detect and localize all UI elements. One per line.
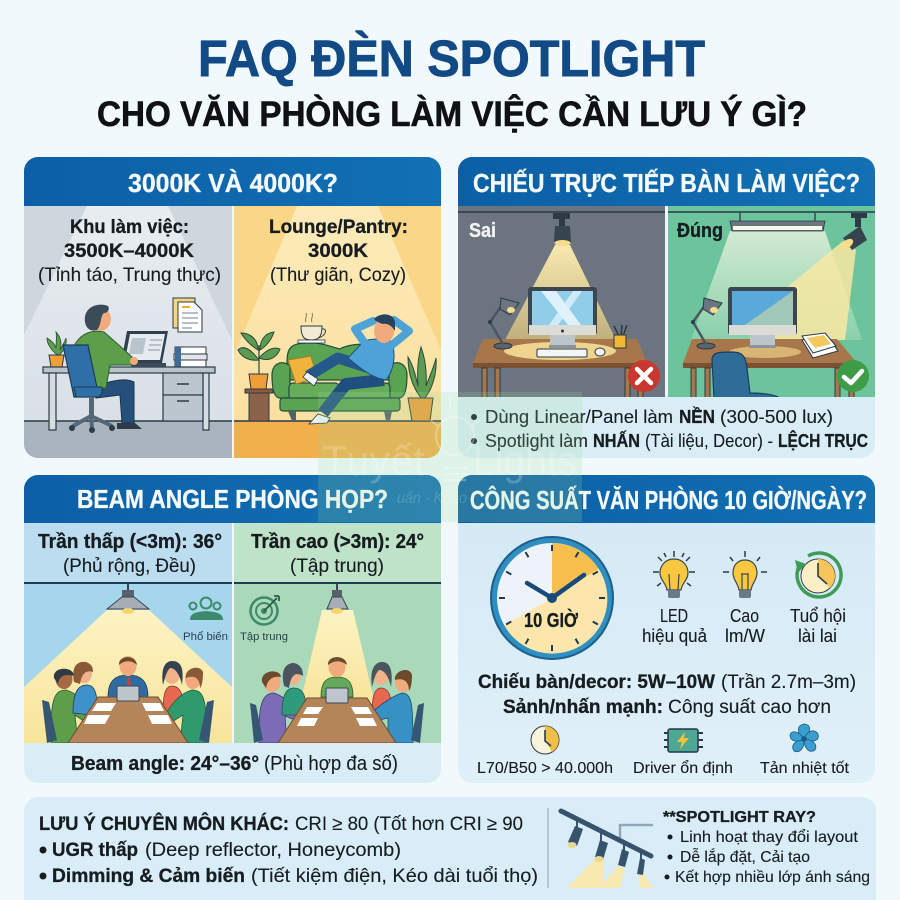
work area text: (Tỉnh táo, Trung thực): [38, 264, 221, 286]
label: Đúng: Đúng: [677, 220, 723, 242]
pillow: [288, 356, 317, 384]
office chair: [63, 345, 115, 433]
watermark: Tuyết Lights: Lights: [473, 437, 577, 484]
right half: lounge scene: [234, 206, 441, 458]
panel: công suất văn phòng 10 giờ/ngày: [458, 475, 875, 783]
high ceiling text: [251, 531, 424, 577]
title: [97, 30, 807, 134]
label: Cao lm/W: [725, 606, 765, 646]
title: FAQ ĐÈN SPOTLIGHT: [198, 30, 705, 87]
beam angle summary: Beam angle: 24°–36°: [71, 753, 259, 775]
expert notes text: Dimming & Cảm biến: [52, 866, 245, 887]
label: Tuổ hội lài lai: [790, 606, 846, 646]
icon: monitor: [728, 287, 797, 348]
spotlight ray text: [663, 809, 870, 886]
relaxing person: [303, 314, 409, 424]
work area text: 3500K–4000K: [64, 240, 194, 262]
work area text: [38, 216, 221, 286]
blue chair: [712, 352, 780, 398]
spotlight ray text: Linh hoạt thay đổi layout: [680, 828, 859, 846]
label: Sai: Sai: [469, 220, 496, 242]
laptop: [121, 331, 168, 367]
subtitle: CHO VĂN PHÒNG LÀM VIỆC CẦN LƯU Ý GÌ?: [97, 94, 807, 134]
bullet notes: [458, 397, 875, 458]
low ceiling text: (Phủ rộng, Đều): [63, 556, 196, 577]
panel: beam angle phòng họp: [24, 475, 441, 783]
high ceiling text: Trần cao (>3m): 24°: [251, 531, 424, 553]
watermark: Tuyết Lights: Tuyết: [322, 437, 425, 484]
work area text: Khu làm việc:: [70, 216, 189, 238]
icon: cooling fan: [790, 724, 818, 752]
icon: potted plant on stool: [238, 332, 280, 421]
desk: [43, 367, 215, 430]
panel: lưu ý chuyên môn khác: [24, 797, 876, 900]
label: Phổ biến: Phổ biến: [183, 631, 228, 643]
chairs: [42, 700, 214, 743]
expert notes text: [39, 813, 538, 887]
keyboard and mouse: [537, 348, 605, 357]
bullet notes: (Tài liệu, Decor) -: [645, 431, 773, 451]
icon: red cross badge: [628, 360, 660, 392]
panel header: 3000K VÀ 4000K?: [128, 169, 338, 198]
right: high ceiling: [234, 523, 441, 744]
icon: desk lamp: [691, 298, 722, 349]
expert notes text: CRI ≥ 80 (Tốt hơn CRI ≥ 90: [295, 814, 523, 835]
panel: 3000K và 4000K: [24, 157, 441, 458]
desk: [473, 339, 647, 398]
bullet notes: (300-500 lux): [720, 407, 833, 427]
bullet notes: NHẤN: [593, 430, 640, 451]
label: L70/B50: L70/B50 > 40.000h: [477, 760, 613, 777]
wattage text: (Trần 2.7m–3m): [721, 672, 856, 693]
high ceiling text: (Tập trung): [290, 556, 384, 577]
lounge text: 3000K: [308, 240, 368, 262]
icon: documents: [173, 298, 202, 332]
wattage text: Chiếu bàn/decor: 5W–10W: [478, 672, 715, 693]
meeting people: [51, 656, 207, 743]
label: Cao lm/W: Cao: [730, 606, 759, 626]
label: Tập trung: Tập trung: [240, 631, 288, 643]
chairs: [250, 703, 424, 743]
icon: linear light: [730, 212, 825, 231]
icon: 10-hour clock: [490, 536, 614, 660]
panel header: CHIẾU TRỰC TIẾP BÀN LÀM VIỆC?: [473, 168, 860, 198]
label: Driver ổn định: Driver ổn định: [633, 759, 733, 777]
icon: lifespan clock: [795, 553, 841, 597]
icon: green check badge: [837, 360, 869, 392]
icon: track spotlights: [561, 811, 653, 888]
lounge text: [269, 216, 408, 286]
beam angle summary: [24, 743, 441, 783]
panel: chiếu trực tiếp bàn làm việc: [458, 157, 875, 458]
icon: plant on desk: [47, 332, 66, 367]
beam angle summary: (Phù hợp đa số): [264, 753, 398, 775]
wattage text: Công suất cao hơn: [668, 697, 831, 718]
icon: angled spotlight: [841, 213, 867, 250]
label: LED hiệu quả: [642, 606, 708, 646]
icon: book stack: [174, 347, 207, 367]
icon: overhead spotlight: [553, 213, 571, 246]
panel header: [458, 475, 875, 523]
left: low ceiling: [24, 523, 232, 744]
label: LED hiệu quả: hiệu quả: [642, 626, 708, 646]
watermark: Tuyết Lights: [318, 392, 582, 522]
person working: [75, 305, 142, 429]
low ceiling text: Trần thấp (<3m): 36°: [38, 531, 222, 553]
icon: bulb LED: [653, 551, 695, 598]
icon: driver chip: [664, 729, 703, 752]
label: LED hiệu quả: LED: [660, 606, 688, 626]
meeting table: [278, 688, 396, 743]
right scene: [667, 206, 875, 398]
bullet notes: Dùng Linear/Panel làm: [485, 407, 673, 427]
wrong scene: [458, 206, 665, 398]
icon: pendant lamp: [327, 584, 348, 614]
bullet notes: LỆCH TRỤC: [778, 430, 868, 451]
left half: work area scene: [24, 206, 232, 458]
bullet notes: Spotlight làm: [485, 431, 588, 451]
expert notes text: UGR thấp: [52, 840, 138, 861]
icon: 10-hour clock: 10 GIỜ: [524, 608, 579, 632]
icon: coffee cup: [298, 313, 325, 343]
label: Tuổ hội lài lai: Tuổ hội: [790, 606, 846, 626]
spotlight ray text: **SPOTLIGHT RAY?: [663, 809, 816, 826]
wattage text: Sảnh/nhấn mạnh:: [503, 697, 663, 718]
wattage text: [478, 672, 856, 718]
green sofa: [272, 343, 407, 421]
label: Tuổ hội lài lai: lài lai: [798, 626, 837, 646]
icon: target: [250, 596, 279, 624]
desk: [683, 339, 857, 398]
icon: small clock: [531, 726, 559, 754]
bullet notes: NỀN: [679, 406, 715, 427]
icon: monitor with glare: [528, 287, 597, 348]
icon: snake plant: [408, 347, 436, 421]
label: Cao lm/W: lm/W: [725, 626, 765, 646]
meeting table: [68, 686, 188, 743]
spotlight ray text: Dễ lắp đặt, Cải tạo: [680, 847, 810, 866]
panel header: [24, 157, 441, 206]
icon: desk lamp: [488, 298, 519, 349]
watermark: Tuyết Lights: uấn - Khảo: [397, 490, 467, 507]
panel header: [24, 475, 441, 523]
lounge text: Lounge/Pantry:: [269, 216, 408, 238]
expert notes text: (Deep reflector, Honeycomb): [145, 840, 401, 861]
spotlight ray text: Kết hợp nhiều lớp ánh sáng: [675, 869, 870, 886]
expert notes text: LƯU Ý CHUYÊN MÔN KHÁC:: [39, 813, 289, 835]
lounge text: (Thư giãn, Cozy): [270, 264, 406, 286]
panel header: [458, 157, 875, 206]
expert notes text: (Tiết kiệm điện, Kéo dài tuổi thọ): [251, 866, 538, 887]
icon: pencil cup: [614, 325, 627, 348]
icon: bulb lm/W: [723, 551, 767, 598]
icon: pendant lamp: [107, 584, 149, 614]
low ceiling text: [38, 531, 222, 577]
label: Tản nhiệt tốt: Tản nhiệt tốt: [760, 760, 850, 777]
panel header: BEAM ANGLE PHÒNG HỌP?: [77, 484, 388, 514]
meeting people: [259, 657, 413, 743]
icon: paper stack: [802, 333, 838, 358]
icon: people group: [190, 598, 223, 620]
